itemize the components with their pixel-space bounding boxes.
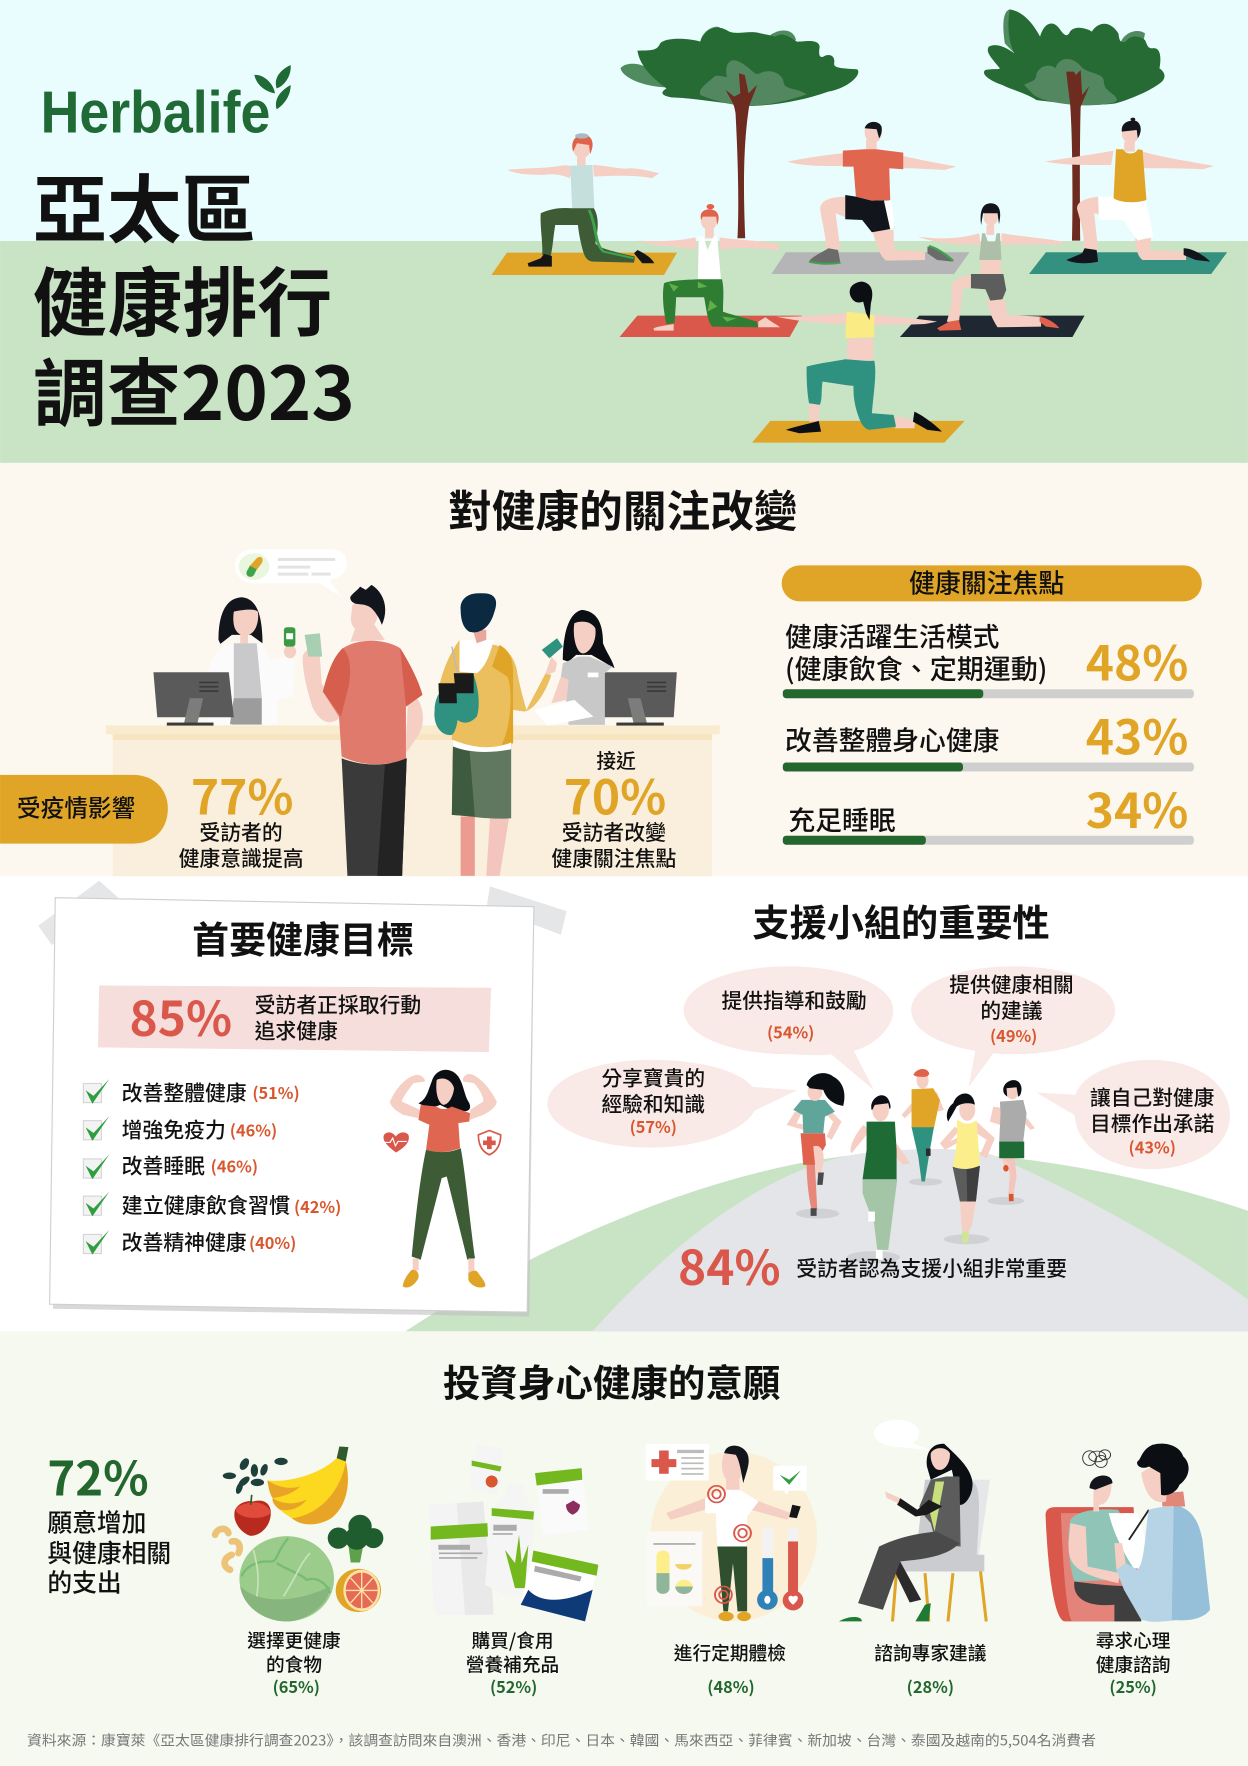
callout: 85%: 85%	[130, 980, 232, 1050]
stat: 72%: 72%	[47, 1441, 149, 1510]
logo: Herbalife: Herbalife	[41, 78, 270, 145]
bubble: shared experience 57%: 經驗和知識	[601, 1088, 705, 1118]
goal 3: 改善睡眠	[122, 1150, 205, 1180]
bubble: advice 49%: 提供健康相關	[949, 968, 1074, 998]
person: pharmacist in white coat	[207, 597, 296, 725]
label: regular checkups: 進行定期體檢	[674, 1639, 786, 1666]
bubble: guidance 54%: (54%)	[767, 1019, 814, 1043]
icon: heart with pulse	[383, 1132, 409, 1152]
bubble: guidance 54%: 提供指導和鼓勵	[722, 984, 867, 1014]
bar: healthy active lifestyle 48%: 48%	[1086, 624, 1188, 694]
goal 2	[83, 1114, 277, 1144]
bubble: commitment 43%	[1036, 1060, 1230, 1169]
label: supplements	[466, 1627, 559, 1698]
runner: mint shirt woman	[787, 1073, 845, 1216]
label: supplements: 購買/食用	[471, 1627, 554, 1654]
callout: pandemic impact: 受疫情影響	[17, 790, 135, 824]
goal 4	[83, 1190, 341, 1220]
person: yoga woman with camo pants	[637, 204, 780, 331]
illustration: trees	[620, 9, 1165, 241]
stat: 77%	[179, 758, 304, 872]
stat: 70%: 接近	[596, 745, 636, 774]
goal 1: (51%)	[252, 1080, 300, 1104]
bar: sufficient sleep 34%	[783, 772, 1194, 845]
goal 2: 增強免疫力	[122, 1114, 226, 1144]
stat: 72%: 的支出	[47, 1563, 122, 1599]
goal 1: 改善整體健康	[122, 1076, 247, 1106]
label: mental health counselling: 尋求心理	[1096, 1627, 1171, 1654]
heading: 支援小組的重要性: 支援小組的重要性	[752, 893, 1050, 947]
goal 3	[83, 1150, 258, 1180]
stat: 72%	[47, 1441, 171, 1599]
bar: sufficient sleep 34%: 充足睡眠	[788, 799, 896, 838]
stat: 70%: 受訪者改變	[562, 816, 666, 846]
bar: healthy active lifestyle 48%: 健康活躍生活模式	[785, 615, 1000, 654]
bar: overall wellbeing 43%: 43%	[1086, 699, 1188, 769]
icon: medical shield	[478, 1130, 501, 1155]
goal 4: 建立健康飲食習慣	[122, 1190, 290, 1220]
person: cashier woman	[534, 610, 614, 726]
stat: 84%: 受訪者認為支援小組非常重要	[796, 1252, 1067, 1282]
illustration: health checkup	[646, 1444, 817, 1621]
counter desk	[106, 725, 720, 876]
bar: healthy active lifestyle 48%: (健康飲食、定期運動)	[785, 648, 1047, 687]
stat: 70%	[551, 745, 677, 872]
person: yoga woman with grey crop top	[918, 203, 1063, 331]
bubble: commitment 43%: (43%)	[1129, 1134, 1176, 1158]
stat: 77%: 受訪者的	[199, 816, 283, 846]
label: supplements: (52%)	[490, 1674, 537, 1698]
illustration: professional advisor	[839, 1420, 990, 1621]
illustration: healthy food	[215, 1446, 383, 1621]
bar: overall wellbeing 43%: 改善整體身心健康	[785, 719, 999, 758]
hill and road	[406, 1149, 1248, 1331]
person: yoga woman in foreground	[776, 282, 942, 433]
illustration: pharmacy speech bubble	[235, 549, 347, 597]
person: yoga woman with mint tank	[507, 133, 659, 267]
callout: 85%: 追求健康	[255, 1014, 338, 1044]
bar: overall wellbeing 43%	[783, 699, 1194, 771]
bubble: shared experience 57%	[547, 1060, 797, 1148]
stat: 77%: 77%	[191, 758, 293, 828]
stat: 84%: 84%	[678, 1229, 781, 1299]
stat: 84%	[678, 1229, 1067, 1299]
goal 1	[83, 1076, 300, 1106]
goal 5: 改善精神健康	[122, 1226, 247, 1256]
label: expert advice: (28%)	[907, 1674, 954, 1698]
title: 亞太區	[33, 152, 256, 259]
label: expert advice	[874, 1639, 987, 1698]
label: supplements: 營養補充品	[466, 1650, 559, 1677]
person: flexing woman	[390, 1070, 497, 1288]
goal 5	[83, 1226, 296, 1256]
label: regular checkups	[674, 1639, 786, 1698]
stat: 70%: 70%	[564, 758, 666, 828]
bubble: commitment 43%: 目標作出承諾	[1090, 1107, 1214, 1137]
title: 健康排行	[33, 243, 332, 352]
illustration: mental health counselling	[1046, 1444, 1210, 1622]
panel: top health goals paper	[38, 881, 567, 1317]
illustration: yoga mats	[491, 252, 1227, 443]
runner: grey shirt woman	[990, 1080, 1035, 1201]
runner: green shirt man	[851, 1095, 910, 1260]
label: healthier food: 的食物	[266, 1650, 322, 1677]
bubble: advice 49%: (49%)	[990, 1023, 1037, 1047]
stat: 72%: 與健康相關	[47, 1534, 171, 1570]
callout: 85%: 受訪者正採取行動	[255, 989, 421, 1019]
panel: health focus	[782, 563, 1202, 845]
goal 5: (40%)	[249, 1230, 296, 1254]
person: yoga man with red shirt	[787, 122, 956, 264]
person: man in red shirt	[303, 585, 423, 876]
bubble: advice 49%: 的建議	[980, 994, 1043, 1024]
label: mental health counselling: 健康諮詢	[1096, 1650, 1170, 1677]
panel heading pill	[782, 563, 1202, 601]
heading: 投資身心健康的意願: 投資身心健康的意願	[443, 1353, 780, 1408]
goal 2: (46%)	[230, 1117, 277, 1141]
title	[33, 152, 355, 442]
label: expert advice: 諮詢專家建議	[874, 1639, 987, 1666]
bubble: advice 49%	[911, 966, 1115, 1087]
heading: 對健康的關注改變: 對健康的關注改變	[448, 476, 798, 540]
callout: pandemic impact	[0, 775, 168, 844]
goal 4: (42%)	[294, 1194, 341, 1218]
bubble: shared experience 57%: (57%)	[630, 1114, 677, 1138]
bar: healthy active lifestyle 48%	[783, 615, 1194, 698]
bubble: commitment 43%: 讓自己對健康	[1090, 1081, 1214, 1111]
source note: 資料來源：康寶萊《亞太區健康排行調查2023》，該調查訪問來自澳洲、香港、印尼、日本、韓國、馬來西亞、菲律賓、新加坡、台灣、泰國及越南的5,504名消費者	[27, 1731, 1096, 1751]
stat: 77%: 健康意識提高	[179, 842, 304, 872]
goal 3: (46%)	[211, 1153, 258, 1177]
monitors	[153, 672, 677, 726]
runners group	[787, 1069, 1035, 1263]
title: 調查2023	[33, 335, 355, 442]
label: regular checkups: (48%)	[707, 1674, 755, 1698]
bar: sufficient sleep 34%: 34%	[1086, 772, 1188, 842]
heading: top goals: 首要健康目標	[192, 910, 414, 964]
person: man in yellow jacket with boxing gloves	[434, 593, 563, 876]
stat: 70%: 健康關注焦點	[551, 842, 677, 872]
stat: 72%: 願意增加	[47, 1504, 146, 1540]
label: healthier food: (65%)	[273, 1674, 320, 1698]
runner: yellow top woman	[940, 1093, 995, 1243]
label: healthier food: 選擇更健康	[247, 1627, 341, 1654]
illustration: supplements	[429, 1445, 598, 1621]
bubble: guidance 54%	[684, 966, 893, 1090]
checklist of goals	[83, 1076, 341, 1256]
label: mental health counselling	[1096, 1627, 1171, 1698]
panel heading pill: 健康關注焦點	[909, 563, 1064, 600]
runner: yellow shirt man in back	[902, 1069, 944, 1182]
callout: 85%	[98, 980, 491, 1052]
label: mental health counselling: (25%)	[1109, 1674, 1157, 1698]
runner shadows	[796, 1178, 1024, 1263]
person: yoga man with yellow tank	[1045, 118, 1214, 263]
label: healthier food	[247, 1627, 341, 1698]
bubble: shared experience 57%: 分享寶貴的	[601, 1062, 705, 1092]
